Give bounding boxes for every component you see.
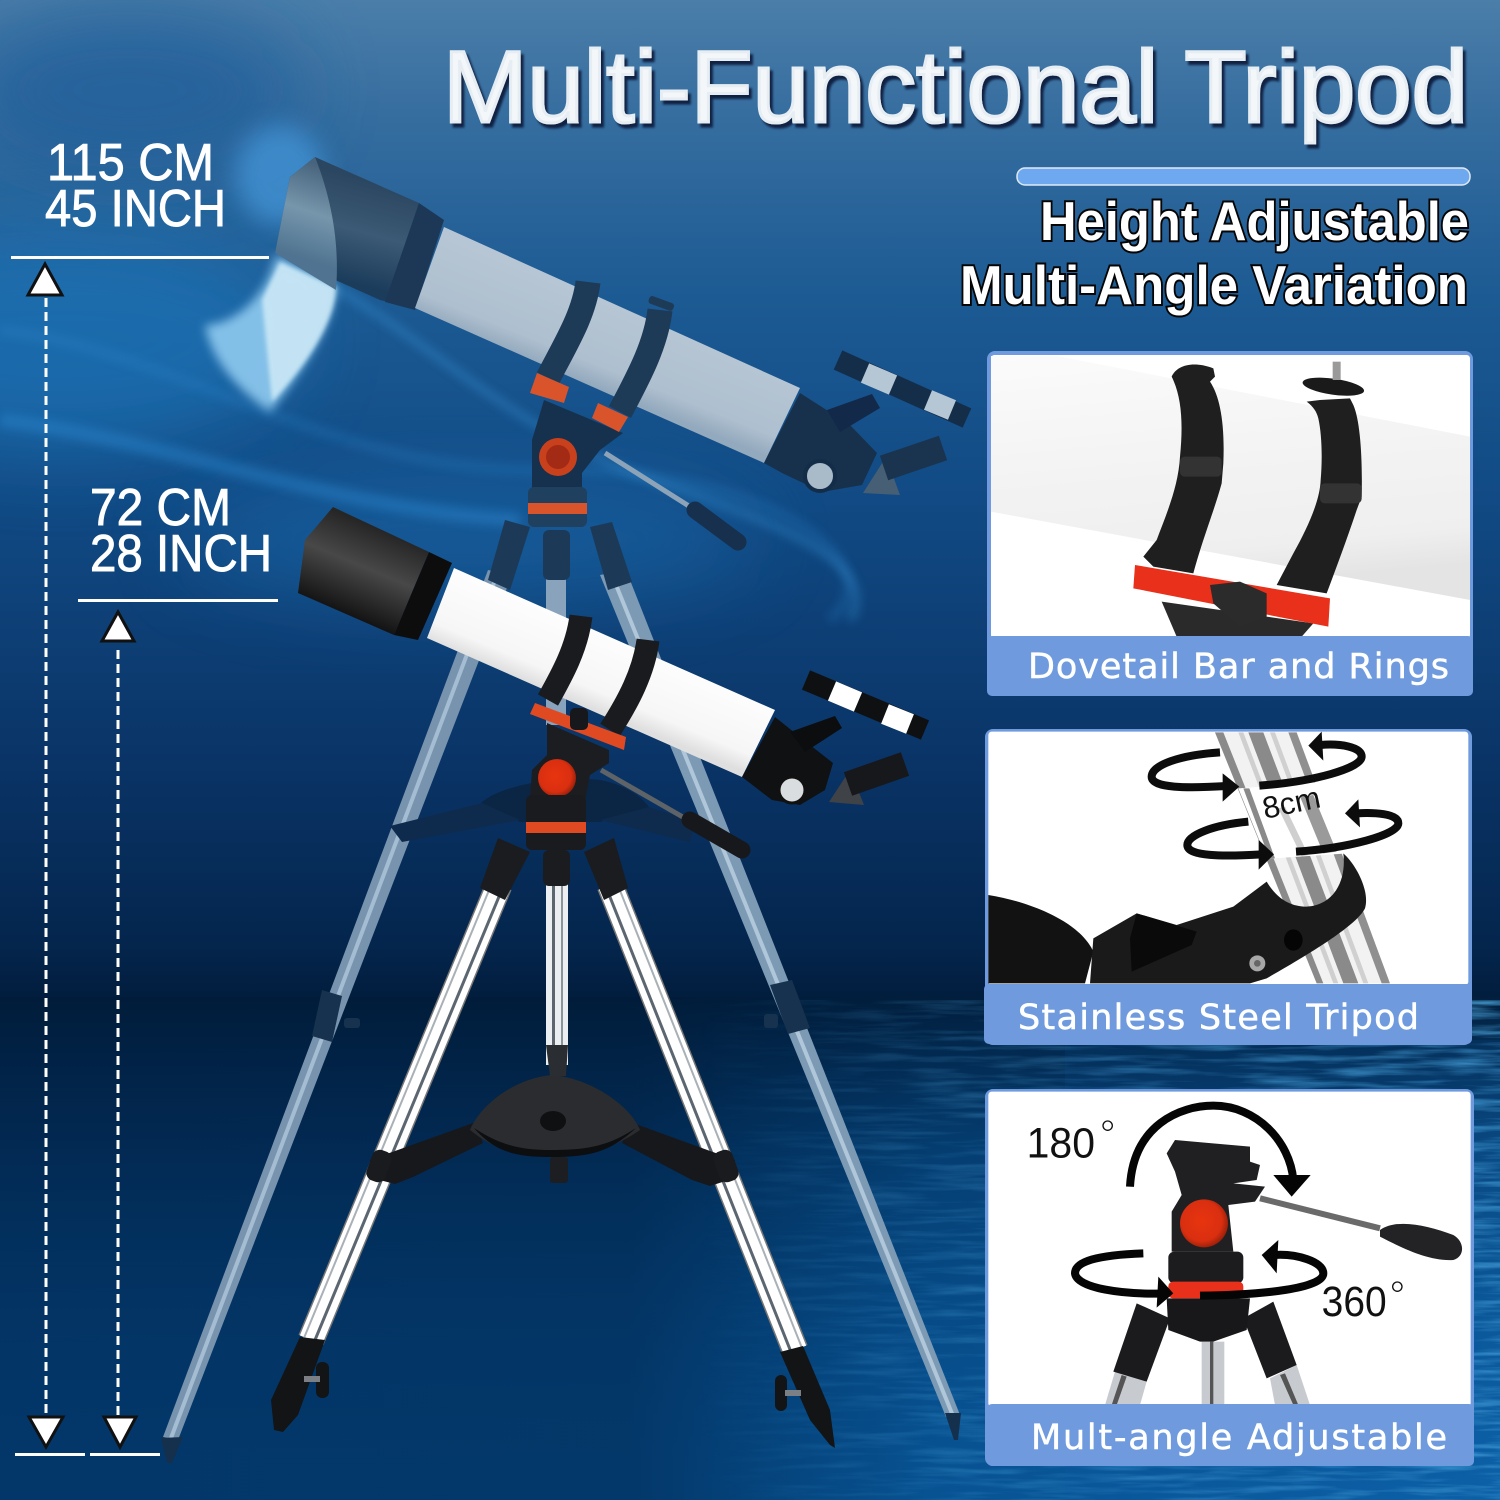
height label: 115 cm / 45 inch (11, 134, 269, 259)
front tripod left leg (304, 883, 503, 1340)
back tripod knuckles (488, 520, 632, 590)
accent bar (1017, 168, 1470, 185)
height label: 115 cm / 45 inch: 45 INCH (45, 180, 226, 238)
dimension arrow: 72 cm (90, 612, 160, 1456)
back tripod tray (390, 779, 695, 842)
back telescope tube rings (548, 282, 660, 412)
front telescope tube (427, 568, 775, 777)
front tripod knuckles (480, 838, 628, 900)
back telescope mount (528, 373, 738, 542)
panel 1 caption: Dovetail Bar and Rings (1028, 647, 1449, 687)
height label: 72 cm / 28 inch: 72 CM (90, 479, 231, 537)
front tripod centre column (546, 875, 568, 1065)
8cm label: 8cm (1259, 780, 1324, 826)
title: Multi-Functional Tripod (443, 30, 1468, 144)
back tripod left leg (163, 570, 512, 1440)
front telescope dew shield (298, 507, 452, 640)
panel 3 caption (987, 1404, 1474, 1466)
back telescope tube (415, 227, 800, 463)
subtitle: Height Adjustable (1040, 190, 1469, 252)
back telescope finder mount bolt (648, 295, 675, 312)
subtitle (960, 190, 1469, 316)
front telescope tube rings (548, 616, 648, 730)
back telescope rear focuser (764, 360, 967, 495)
back tripod centre column (546, 575, 566, 725)
height label: 72 cm / 28 inch (78, 479, 278, 602)
panel: stainless steel tripod (984, 729, 1472, 1045)
panel 1 photo: tube, rings, dovetail (991, 355, 1470, 638)
back telescope (extended height) (275, 157, 967, 542)
dimension arrow: 115 cm (15, 264, 85, 1456)
180 degree label: 180 (1027, 1120, 1095, 1168)
panel: multi-angle adjustable (985, 1089, 1474, 1466)
panel 1 caption (987, 636, 1473, 696)
front telescope rear focuser (742, 680, 925, 805)
back tripod feet (161, 1413, 961, 1463)
back telescope dew shield (275, 157, 444, 310)
back tripod leg clamps (312, 980, 810, 1042)
back tripod (extended, faded) (161, 520, 961, 1463)
panel 3 photo: pan head with rotation arrows (988, 1092, 1471, 1407)
front tripod accessory tray (364, 1045, 741, 1186)
front tripod feet (271, 1337, 835, 1448)
panel 2 caption: Stainless Steel Tripod (1018, 998, 1419, 1038)
panel 2 photo: leg clamp and rotation arrows (988, 732, 1468, 985)
front telescope mount (526, 703, 742, 850)
front telescope (collapsed height) (298, 507, 925, 850)
panel 3 caption: Mult-angle Adjustable (1031, 1418, 1447, 1458)
front tripod (collapsed) (271, 838, 835, 1448)
front tripod right leg (606, 883, 802, 1352)
panel: dovetail bar and rings (987, 351, 1473, 696)
panel 2 caption (984, 984, 1472, 1044)
height label: 115 cm / 45 inch: 115 CM (47, 134, 214, 192)
back tripod right leg (600, 570, 960, 1417)
subtitle: Multi-Angle Variation (960, 254, 1468, 316)
height label: 72 cm / 28 inch: 28 INCH (90, 525, 272, 583)
360 degree label: 360 (1322, 1278, 1387, 1326)
